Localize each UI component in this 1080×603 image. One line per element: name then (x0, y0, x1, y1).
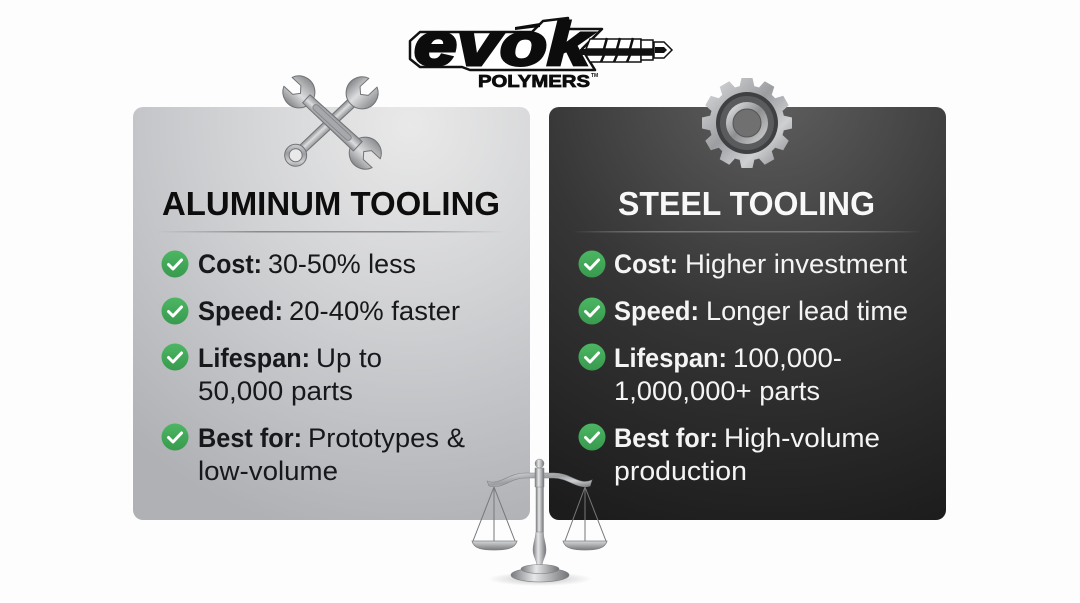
item: cost: 30-50% less (268, 249, 416, 279)
item: lifespan: 100,000- (733, 343, 842, 373)
item: best for: Best for: (614, 423, 718, 453)
scale base (511, 568, 569, 582)
item: lifespan: 50,000 parts (198, 376, 353, 406)
item: best for (578, 423, 880, 486)
scale beam (487, 473, 592, 487)
item: cost: Cost: (198, 249, 262, 279)
scale pillar (536, 478, 544, 546)
item: lifespan: Up to (316, 343, 382, 373)
panel: steel tooling (549, 107, 946, 520)
item: lifespan: Lifespan: (614, 343, 727, 373)
item: best for: production (614, 456, 747, 486)
item: best for: Prototypes & (308, 423, 465, 453)
item: speed: Longer lead time (706, 296, 908, 326)
item: cost: Higher investment (685, 249, 908, 279)
logo subtitle: POLYMERS (478, 71, 590, 91)
icon: gear (700, 76, 794, 170)
item: lifespan: 1,000,000+ parts (614, 376, 820, 406)
heading: aluminum tooling: ALUMINUM TOOLING (162, 185, 500, 222)
item: speed: Speed: (198, 296, 283, 326)
scale right pan (563, 541, 607, 550)
item: speed (578, 296, 908, 326)
panel: aluminum tooling (133, 107, 530, 520)
item: speed (162, 296, 460, 326)
gear dark band (716, 92, 778, 154)
item: cost (162, 249, 416, 279)
item: speed: 20-40% faster (289, 296, 460, 326)
logo outline (410, 18, 602, 70)
logo wordmark: evok (414, 11, 593, 78)
scale shadow (488, 572, 592, 586)
item: best for: High-volume (724, 423, 880, 453)
logo: evok polymers: TM (591, 73, 598, 79)
scale left pan (472, 541, 517, 550)
item: lifespan: Lifespan: (198, 343, 310, 373)
logo: evok polymers (410, 11, 672, 91)
heading: steel tooling: STEEL TOOLING (618, 185, 875, 222)
gear inner ring (726, 102, 768, 144)
infographic (133, 16, 946, 585)
item: cost: Cost: (614, 249, 678, 279)
logo screw (580, 38, 672, 62)
item: cost (578, 249, 908, 279)
icon: crossed wrenches (277, 70, 387, 175)
gear body (700, 76, 794, 170)
item: speed: Speed: (614, 296, 699, 326)
icon: balance scale (472, 459, 607, 586)
wrench: open ends (277, 70, 387, 175)
wrench: ring end (277, 71, 384, 174)
item: lifespan (162, 343, 382, 406)
item: lifespan (578, 343, 842, 406)
item: best for: low-volume (198, 456, 338, 486)
scale strings (473, 487, 606, 541)
item: best for: Best for: (198, 423, 302, 453)
item: best for (162, 423, 465, 486)
